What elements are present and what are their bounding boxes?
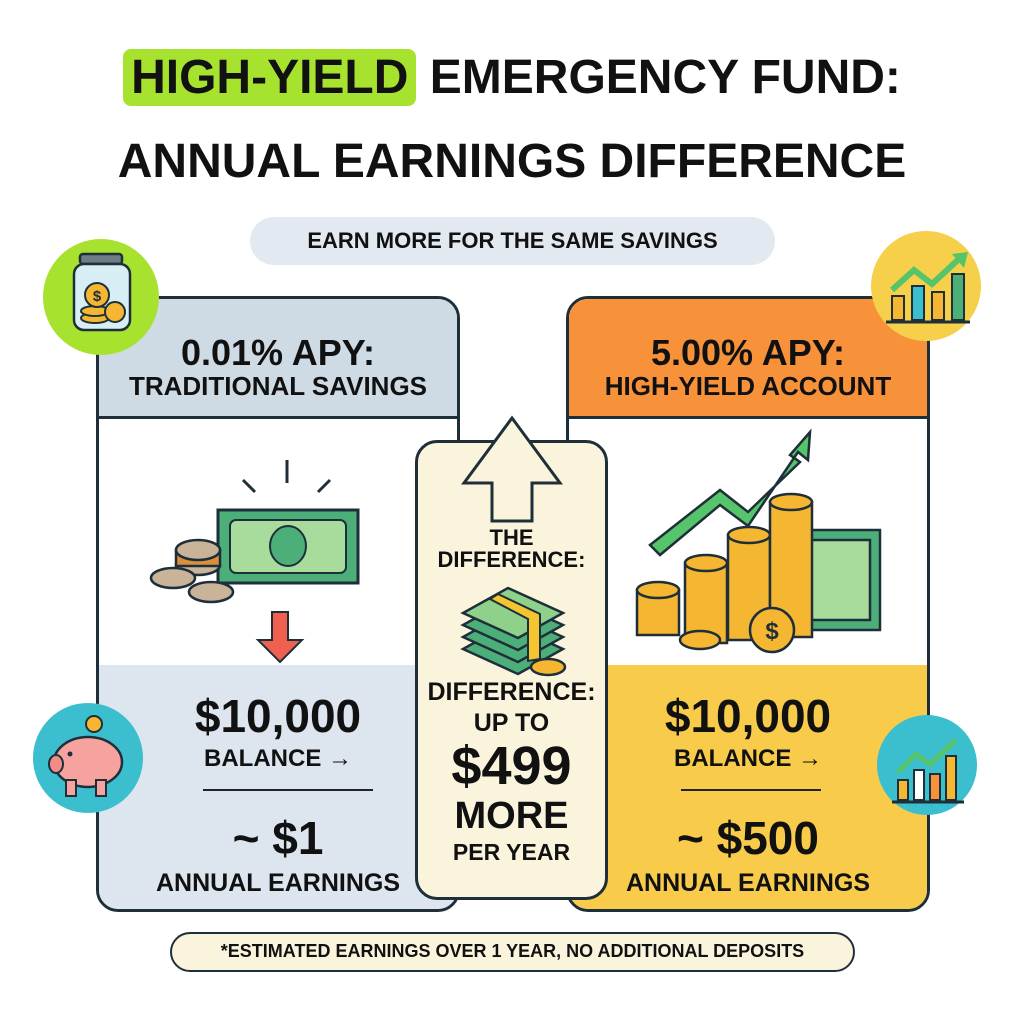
header: 5.00% APY (569, 299, 927, 419)
icon: growth arrow with coin stacks (636, 428, 882, 654)
subtitle pill (250, 217, 775, 265)
bottom values: ~ $1 (233, 812, 323, 864)
arrow: up outline (461, 416, 563, 522)
panel: the difference: $499 (451, 736, 572, 796)
bottom values (569, 665, 927, 915)
bottom values: BALANCE → (204, 745, 352, 772)
icon: piggy bank circle (33, 703, 143, 813)
bottom values: ~ $500 (677, 812, 819, 864)
bottom values: ANNUAL EARNINGS (156, 869, 400, 897)
panel: the difference: THE (490, 525, 534, 550)
panel: traditional savings (96, 296, 460, 912)
panel: the difference: PER YEAR (453, 839, 570, 865)
footnote pill (170, 932, 855, 972)
panel: the difference: DIFFERENCE: (438, 547, 585, 572)
header: 5.00% APY: 5.00% APY: (651, 332, 845, 373)
bottom values: BALANCE → (674, 745, 822, 772)
bottom values: ANNUAL EARNINGS (626, 869, 870, 897)
icon: cash stack (460, 586, 566, 676)
icon: chart circle teal (877, 715, 977, 815)
header: 0.01% APY: TRADITIONAL SAVINGS (129, 371, 427, 401)
title (118, 49, 906, 188)
panel: the difference (415, 440, 608, 900)
icon: jar circle (43, 239, 159, 355)
bottom values (99, 665, 457, 915)
panel: high-yield account (566, 296, 930, 912)
icon: growth arrow with coin stacks: $ (765, 618, 779, 645)
title: ANNUAL EARNINGS DIFFERENCE (118, 135, 906, 188)
panel: the difference: MORE (454, 795, 568, 837)
title: HIGH-YIELD EMERGENCY FUND: (131, 51, 901, 104)
footnote pill: *ESTIMATED EARNINGS OVER 1 YEAR, NO ADDITIONAL DEPOSITS (221, 941, 804, 961)
icon: jar circle: $ (93, 288, 102, 305)
bottom values: $10,000 (195, 690, 361, 742)
panel: the difference: UP TO (474, 709, 549, 737)
icon: chart circle yellow (871, 231, 981, 341)
bottom values: $10,000 (665, 690, 831, 742)
panel: the difference: DIFFERENCE: (427, 678, 596, 706)
header: 5.00% APY: HIGH-YIELD ACCOUNT (605, 371, 891, 401)
header: 0.01% APY: 0.01% APY: (181, 332, 375, 373)
subtitle pill: EARN MORE FOR THE SAME SAVINGS (307, 228, 718, 253)
header: 0.01% APY (99, 299, 457, 419)
icon: cash and coins (150, 460, 360, 664)
